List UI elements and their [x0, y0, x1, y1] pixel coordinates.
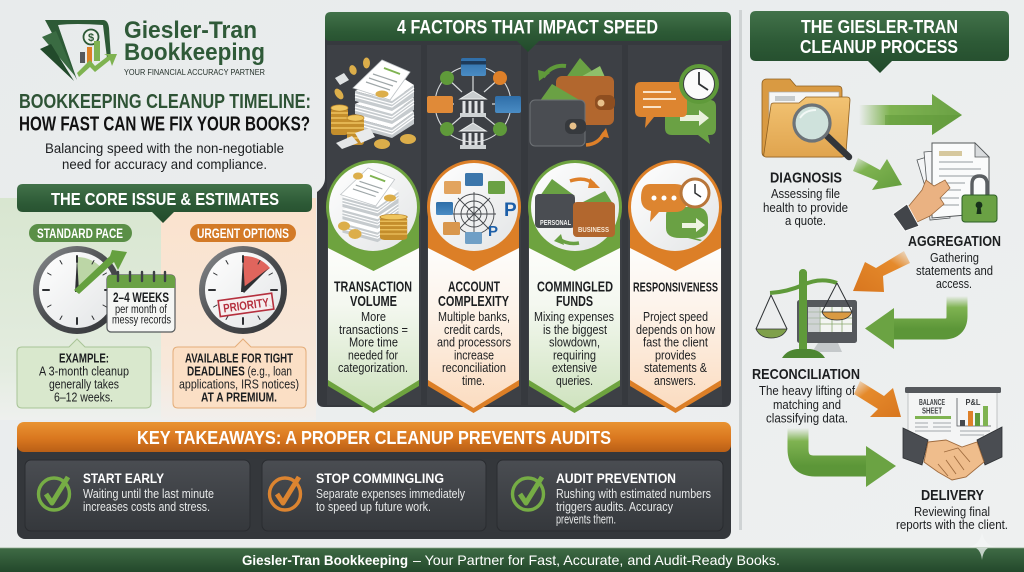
banner: the core issue and estimates: THE CORE ISSUE & ESTIMATES: [51, 189, 279, 209]
card: account complexity: increase: [454, 348, 494, 362]
arrow: diagnosis right: [859, 94, 962, 135]
circle icon: personal and business wallets: PERSONAL: [540, 218, 571, 227]
arrow: aggregation to reconciliation: [853, 251, 910, 292]
card: responsiveness: provides: [655, 348, 696, 362]
card: responsiveness: statements &: [644, 360, 707, 375]
text: aggregation: access.: [936, 276, 972, 291]
callout: urgent availability: [173, 339, 306, 408]
footer bar: – Your Partner for Fast, Accurate, and Audit-Ready Books.: [413, 552, 780, 568]
card: commingled funds: COMMINGLED: [537, 278, 613, 296]
icon: two wallets: [530, 58, 615, 146]
callout: urgent availability: AVAILABLE FOR TIGHT: [185, 350, 293, 366]
heading: 4 factors: [325, 12, 731, 52]
text: reconciliation: classifying data.: [766, 410, 848, 426]
arrow: reconciliation to delivery: [854, 381, 901, 417]
pill: urgent options: URGENT OPTIONS: [197, 226, 289, 241]
takeaway: audit prevention: prevents them.: [556, 512, 616, 526]
circle icon: documents and coins: [338, 168, 407, 242]
card: commingled funds: extensive: [552, 360, 597, 375]
heading: the cleanup process: [750, 11, 1009, 73]
card: commingled funds: [528, 160, 622, 413]
card: commingled funds: Mixing expenses: [534, 309, 614, 324]
card: account complexity: credit cards,: [444, 322, 503, 337]
takeaway: stop commingling: Separate expenses immediately: [316, 487, 466, 501]
callout: example: [17, 339, 151, 408]
callout: urgent availability: AT A PREMIUM.: [201, 390, 277, 404]
banner: the core issue and estimates: [17, 184, 312, 223]
text: aggregation: [908, 233, 1001, 291]
logo: [40, 17, 265, 81]
icon: reports and handshake: BALANCE: [919, 397, 945, 407]
takeaway: start early: [25, 460, 250, 531]
heading: key takeaways: KEY TAKEAWAYS: A PROPER CLEANUP PREVENTS AUDITS: [137, 427, 611, 448]
icon: calendar with estimate: 2–4 WEEKS: [113, 290, 169, 305]
icon: bank network: [427, 58, 521, 149]
circle icon: chat and clock: [641, 179, 709, 241]
icon: reports and handshake: [903, 387, 1002, 480]
icon: orange check: [270, 477, 300, 510]
arrow: diagnosis to aggregation: [853, 158, 902, 190]
circle icon: web of accounts: P: [504, 200, 517, 221]
arrow: curved to delivery: [798, 428, 896, 487]
card: responsiveness: depends on how: [636, 322, 715, 337]
card: account complexity: and processors: [437, 334, 511, 350]
circle icon: personal and business wallets: [535, 178, 615, 245]
icon: folder with magnifier: [762, 79, 850, 157]
title block: HOW FAST CAN WE FIX YOUR BOOKS?: [19, 114, 310, 136]
callout: urgent availability: applications, IRS notices): [179, 376, 299, 392]
text: diagnosis: a quote.: [785, 213, 826, 228]
text: aggregation: AGGREGATION: [908, 233, 1001, 250]
circle icon: web of accounts: [436, 173, 517, 244]
icon: green check: [512, 477, 544, 510]
text: diagnosis: health to provide: [763, 200, 848, 215]
text: reconciliation: The heavy lifting of: [759, 383, 855, 398]
card: responsiveness: answers.: [654, 373, 696, 388]
footer bar: Giesler-Tran Bookkeeping: [242, 552, 408, 568]
pill: standard pace: STANDARD PACE: [37, 226, 123, 241]
title block: BOOKKEEPING CLEANUP TIMELINE:: [19, 91, 311, 113]
card: account complexity: [427, 160, 521, 413]
text: delivery: DELIVERY: [921, 487, 984, 504]
takeaway: stop commingling: [262, 460, 486, 531]
pill: standard pace: [29, 224, 132, 242]
icon: reports and handshake: SHEET: [922, 406, 943, 416]
takeaway: stop commingling: to speed up future work.: [316, 500, 431, 514]
callout: urgent availability: DEADLINES (e.g., loan: [187, 364, 292, 378]
takeaway: start early: Waiting until the last minute: [83, 487, 214, 501]
card: transaction volume: transactions =: [339, 322, 408, 337]
icon: calendar with estimate: messy records: [112, 314, 171, 326]
text: diagnosis: [763, 170, 848, 228]
panel: key takeaways: [17, 422, 731, 539]
card: account complexity: reconciliation: [442, 360, 506, 375]
icon: calendar with estimate: [107, 272, 175, 332]
icon: green check: [38, 477, 70, 510]
card: commingled funds: slowdown,: [549, 334, 600, 350]
title block: Balancing speed with the non-negotiable: [45, 140, 284, 156]
logo: Bookkeeping: [124, 39, 265, 66]
card: transaction volume: needed for: [348, 348, 399, 362]
panel: 4 factors: [317, 12, 731, 407]
card: responsiveness: Project speed: [643, 309, 708, 324]
takeaway: audit prevention: [497, 460, 723, 531]
icon: standard clock with arrow: [33, 246, 127, 334]
callout: example: 6–12 weeks.: [54, 390, 113, 404]
text: reconciliation: RECONCILIATION: [752, 366, 860, 383]
text: delivery: [896, 487, 1008, 532]
heading: key takeaways: [17, 422, 731, 452]
text: delivery: reports with the client.: [896, 517, 1008, 532]
text: aggregation: Gathering: [930, 250, 979, 265]
takeaway: stop commingling: STOP COMMINGLING: [316, 470, 444, 486]
card: responsiveness: RESPONSIVENESS: [633, 280, 718, 294]
takeaway: start early: START EARLY: [83, 470, 165, 486]
card: commingled funds: queries.: [556, 373, 593, 388]
icon: paper stack and coins: [331, 58, 416, 149]
card: transaction volume: More time: [349, 334, 398, 350]
icon: priority clock: [199, 246, 287, 334]
heading: the cleanup process: THE GIESLER-TRAN: [801, 16, 958, 37]
card: account complexity: Multiple banks,: [438, 309, 510, 324]
icon: calendar with estimate: per month of: [115, 304, 168, 316]
card: account complexity: COMPLEXITY: [438, 293, 509, 310]
pill: urgent options: [190, 224, 296, 242]
heading: the cleanup process: CLEANUP PROCESS: [800, 36, 958, 57]
logo mark: $: [88, 32, 94, 44]
card: transaction volume: More: [361, 309, 386, 324]
callout: example: generally takes: [49, 376, 119, 392]
card: responsiveness: [628, 160, 722, 413]
card: commingled funds: FUNDS: [556, 293, 593, 310]
heading: 4 factors: 4 FACTORS THAT IMPACT SPEED: [397, 16, 658, 38]
logo: YOUR FINANCIAL ACCURACY PARTNER: [124, 68, 265, 77]
callout: example: A 3-month cleanup: [39, 364, 129, 378]
card: commingled funds: requiring: [553, 348, 596, 362]
card: transaction volume: TRANSACTION: [334, 278, 412, 296]
title block: [19, 91, 311, 172]
text: delivery: Reviewing final: [914, 504, 990, 519]
takeaway: audit prevention: triggers audits. Accuracy: [556, 500, 674, 514]
title block: need for accuracy and compliance.: [62, 156, 267, 172]
icon: documents, hand and lock: [893, 143, 997, 231]
card: transaction volume: VOLUME: [350, 293, 397, 310]
text: diagnosis: Assessing file: [771, 186, 840, 201]
text: diagnosis: DIAGNOSIS: [770, 170, 842, 186]
icon: reports and handshake: P&L: [966, 397, 980, 407]
card: transaction volume: [326, 160, 420, 413]
text: aggregation: statements and: [916, 263, 993, 278]
icon: chat bubbles and clock: [635, 64, 719, 144]
circle icon: personal and business wallets: BUSINESS: [578, 225, 609, 234]
logo mark: [40, 20, 117, 81]
text: reconciliation: matching and: [773, 397, 841, 412]
arrow: curved back to reconciliation: [865, 296, 957, 349]
icon: scales and monitor: [756, 269, 857, 358]
callout: example: EXAMPLE:: [59, 350, 109, 366]
circle icon: web of accounts: P: [488, 223, 498, 240]
takeaway: audit prevention: AUDIT PREVENTION: [556, 470, 676, 486]
takeaway: audit prevention: Rushing with estimated numbers: [556, 487, 711, 501]
text: reconciliation: [752, 366, 860, 426]
card: account complexity: ACCOUNT: [448, 278, 500, 296]
card: responsiveness: fast the client: [643, 334, 708, 350]
card: commingled funds: is the biggest: [543, 322, 607, 337]
card: account complexity: time.: [462, 373, 485, 388]
stamp: priority: PRIORITY: [222, 295, 270, 315]
company name: Giesler-Tran: [124, 17, 257, 44]
footer bar: [0, 547, 1024, 572]
takeaway: start early: increases costs and stress.: [83, 500, 210, 514]
card: transaction volume: categorization.: [338, 360, 408, 375]
